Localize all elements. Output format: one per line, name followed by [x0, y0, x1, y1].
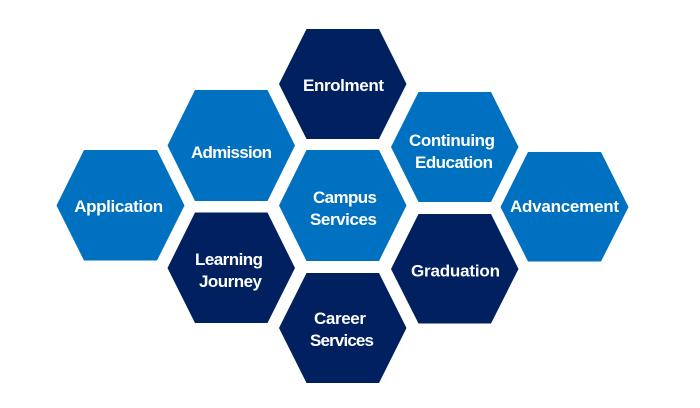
hexagon: Enrolment	[279, 29, 406, 139]
hexagon: Advancement	[500, 152, 628, 262]
hexagon: Admission	[168, 90, 295, 201]
hexagon: Advancement: Advancement	[510, 197, 619, 216]
hexagon: Application	[56, 150, 184, 260]
hexagon: Career Services: Services	[310, 331, 374, 350]
hexagon: Continuing Education: Continuing	[409, 131, 495, 150]
hexagon: Learning Journey: Learning	[195, 250, 263, 269]
hexagon: Admission: Admission	[191, 143, 272, 162]
hexagon: Application: Application	[74, 197, 163, 216]
hexagon: Graduation: Graduation	[411, 262, 500, 280]
hexagon: Campus Services	[279, 150, 406, 261]
hexagon: Continuing Education	[391, 92, 518, 202]
hexagon: Campus Services: Campus	[313, 188, 377, 207]
hexagon: Learning Journey: Journey	[199, 272, 263, 291]
hexagon: Continuing Education: Education	[415, 153, 493, 172]
hexagon: Learning Journey	[168, 212, 295, 323]
hexagon: Enrolment: Enrolment	[303, 76, 384, 95]
hexagon: Career Services: Career	[314, 309, 366, 328]
hexagon: Graduation	[391, 214, 518, 324]
hexagon: Career Services	[279, 273, 406, 383]
hexagon: Campus Services: Services	[310, 210, 377, 229]
